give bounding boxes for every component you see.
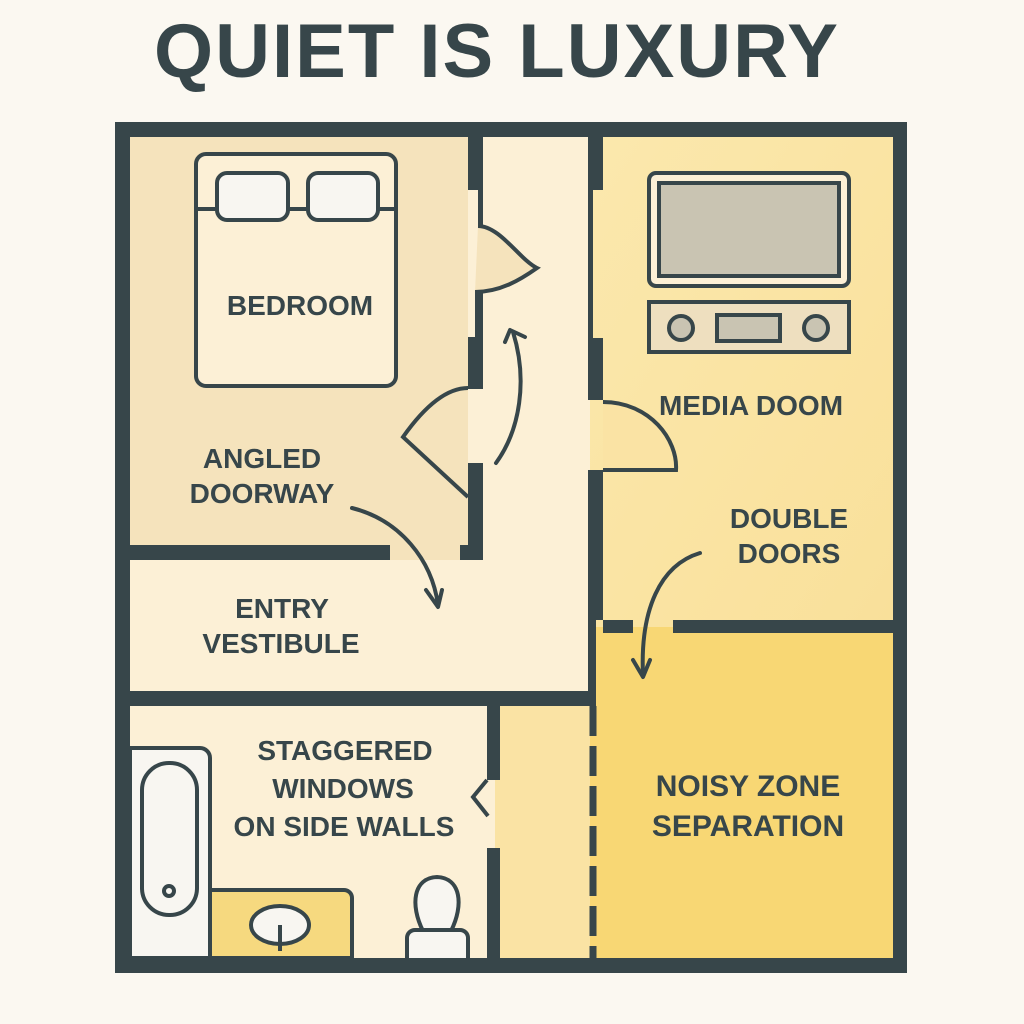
room: media room: DOUBLE	[730, 503, 848, 534]
room: bathroom: ON SIDE WALLS	[234, 811, 454, 842]
room: entry vestibule: ENTRY	[235, 593, 329, 624]
room: media room	[590, 137, 893, 627]
room: bedroom	[130, 137, 468, 560]
label: bedroom: BEDROOM	[227, 290, 373, 321]
dashed partition	[590, 706, 596, 958]
arrows	[352, 330, 700, 677]
room: entry vestibule	[130, 560, 588, 691]
walls	[115, 122, 907, 973]
icon: media console	[649, 302, 849, 352]
room: bathroom: WINDOWS	[272, 773, 414, 804]
room: noisy zone	[588, 627, 893, 958]
room: bathroom	[130, 706, 590, 958]
icon: vanity sink	[210, 890, 352, 958]
label: doorway line2: DOORWAY	[190, 478, 335, 509]
icon: toilet	[407, 877, 468, 958]
label: angled doorway: ANGLED	[203, 443, 321, 474]
icon: bathtub	[130, 748, 210, 958]
room: noisy zone: SEPARATION	[652, 810, 844, 843]
title: QUIET IS LUXURY	[154, 9, 840, 94]
doors	[403, 226, 676, 816]
room: entry vestibule: VESTIBULE	[202, 628, 360, 659]
room: media room: MEDIA DOOM	[659, 390, 843, 421]
icon: bed	[196, 154, 396, 386]
room: media room: DOORS	[738, 538, 840, 569]
room: corridor	[466, 137, 598, 697]
floor plan	[115, 122, 907, 973]
room: noisy zone: NOISY ZONE	[656, 770, 840, 803]
icon: tv	[649, 173, 849, 286]
room: bathroom: STAGGERED	[257, 735, 433, 766]
